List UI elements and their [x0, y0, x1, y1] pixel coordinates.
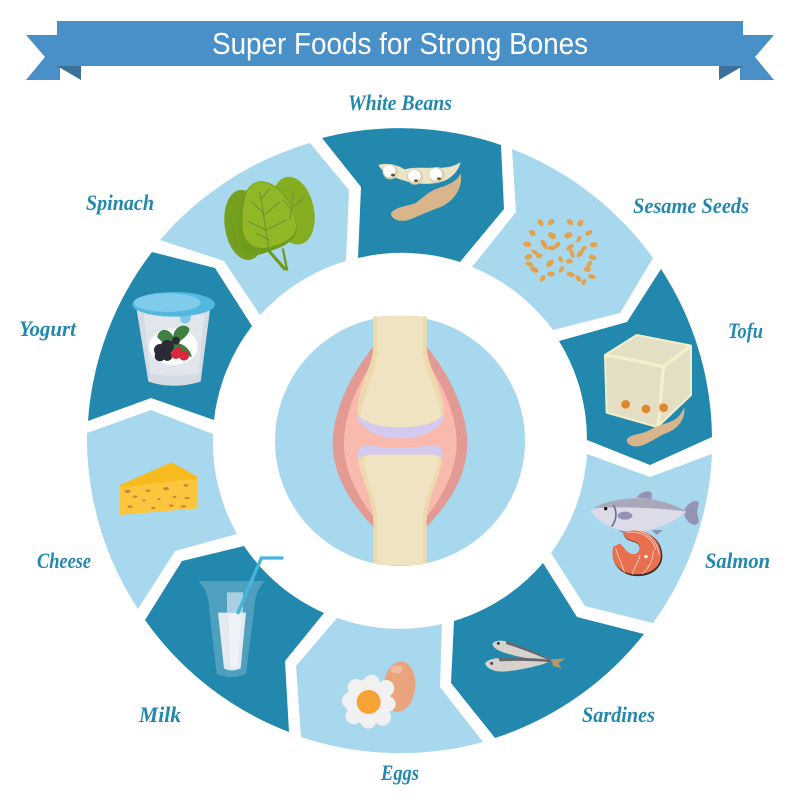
icon: white beans — [378, 162, 461, 221]
label: Salmon: Salmon — [705, 548, 770, 573]
panel: sesame seeds — [472, 149, 749, 330]
icon: spinach — [220, 173, 321, 271]
panel: white beans — [322, 90, 504, 262]
icon: salmon — [591, 491, 699, 576]
title: Super Foods for Strong Bones — [212, 26, 588, 61]
panel: tofu — [559, 269, 763, 465]
panel: salmon — [551, 454, 770, 623]
label: Cheese: Cheese — [37, 548, 91, 573]
panel: yogurt — [19, 252, 252, 421]
label: Milk: Milk — [138, 702, 181, 727]
panel: cheese — [37, 410, 237, 609]
icon: cheese — [120, 462, 197, 515]
label: Eggs: Eggs — [380, 760, 419, 785]
icon: sesame seeds — [523, 218, 598, 286]
icon: glass of milk — [198, 558, 282, 677]
label: Sesame Seeds: Sesame Seeds — [633, 193, 749, 218]
icon: yogurt cup — [132, 292, 215, 386]
icon: tofu — [605, 335, 691, 446]
label: White Beans: White Beans — [348, 90, 452, 115]
label: Spinach: Spinach — [86, 190, 154, 215]
label: Sardines: Sardines — [582, 702, 655, 727]
panel: sardines — [451, 563, 655, 738]
title banner — [26, 21, 774, 80]
panel: eggs — [296, 618, 483, 785]
label: Yogurt: Yogurt — [19, 316, 77, 341]
icon: eggs — [342, 660, 418, 729]
center circle: bone joint — [275, 316, 525, 566]
joint illustration — [333, 316, 467, 565]
panel: spinach — [86, 143, 349, 315]
label: Tofu: Tofu — [728, 318, 763, 343]
icon: sardines — [485, 641, 565, 672]
panel: milk — [138, 546, 324, 732]
